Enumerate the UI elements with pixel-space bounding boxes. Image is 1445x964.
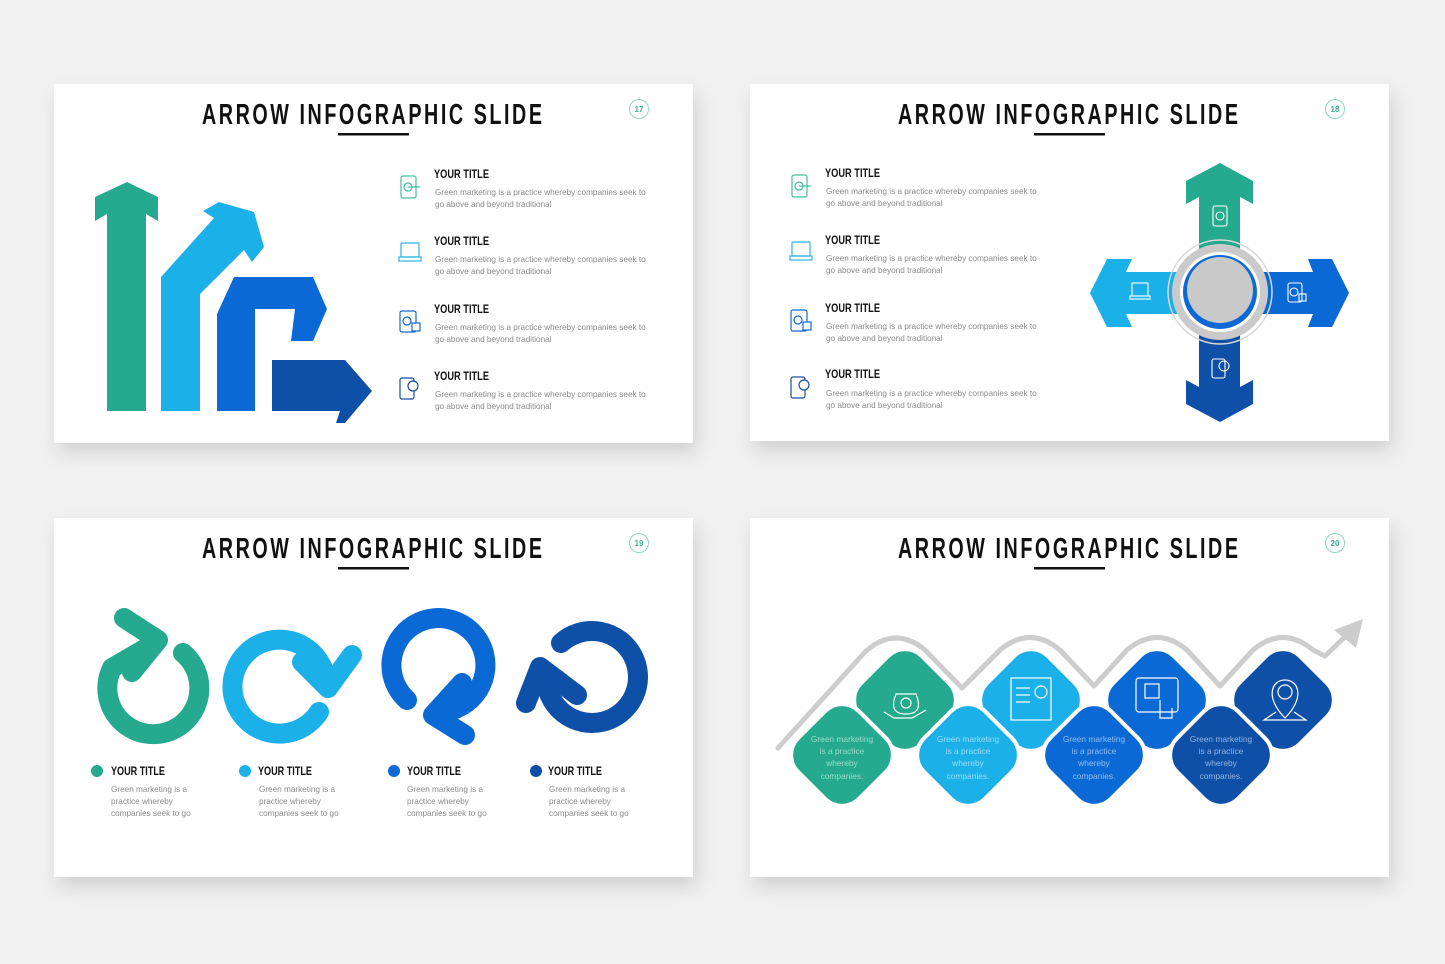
diamonds row [781,639,1344,816]
legend 2: YOUR TITLE [258,766,312,778]
icons on arrows [1130,206,1306,378]
item 2 [790,235,1037,275]
item 2: YOUR TITLE [434,236,489,248]
item 4 [400,371,646,411]
diamond: dark blue text: is a practice [1199,746,1244,756]
item 2: go above and beyond traditional [826,266,943,275]
diamond: blue text: Green marketing [1063,734,1126,744]
page number [1326,534,1344,552]
item 2: Green marketing is a practice whereby companies seek to [826,254,1037,263]
item 3: YOUR TITLE [434,304,489,316]
diamond: green text: is a practice [820,746,865,756]
legend 2: companies seek to go [259,809,339,818]
item 3 [400,304,646,344]
legend 3: companies seek to go [407,809,487,818]
title: ARROW INFOGRAPHIC SLIDE [898,533,1238,565]
legend 4: Green marketing is a [549,785,625,794]
item 1: YOUR TITLE [434,169,489,181]
circular arrow: dark blue [526,631,638,723]
item 1 [792,168,1037,208]
arrow: blue bend [217,277,327,411]
gray zigzag arrow [778,619,1363,748]
page number [630,534,648,552]
page number [630,100,648,118]
legend 3: YOUR TITLE [407,766,461,778]
legend 3: Green marketing is a [407,785,483,794]
item 1: go above and beyond traditional [826,199,943,208]
item 4: Green marketing is a practice whereby companies seek to [826,389,1037,398]
item 4: YOUR TITLE [434,371,489,383]
circular arrow: blue [391,618,485,735]
item 1: Green marketing is a practice whereby companies seek to [435,188,646,197]
item 3: go above and beyond traditional [435,335,552,344]
legend items [91,765,629,818]
item 2: YOUR TITLE [825,235,880,247]
list items [399,169,646,411]
item 1: go above and beyond traditional [435,200,552,209]
diamond: dark blue text [1160,694,1282,816]
diamond: dark blue text: companies. [1200,771,1242,781]
legend 4: practice whereby [549,797,612,806]
title: ARROW INFOGRAPHIC SLIDE [202,99,542,131]
panel: slide 17 [54,84,693,443]
panel: slide 19 [54,518,693,877]
item 3 [791,303,1037,343]
legend 3 [388,765,487,818]
arrow: up green [1186,163,1253,293]
diamond: blue text [1033,694,1155,816]
item 3: go above and beyond traditional [826,334,943,343]
diamond: green text: Green marketing [811,734,874,744]
circular arrow: green [107,618,199,734]
legend 1: Green marketing is a [111,785,187,794]
diamond: light blue text: is a practice [946,746,991,756]
item 1 [401,169,646,209]
page number: 18 [1331,105,1340,114]
diamond: dark blue icon [1222,639,1344,761]
legend 2: practice whereby [259,797,322,806]
item 1: Green marketing is a practice whereby companies seek to [826,187,1037,196]
list items [790,168,1037,410]
item 4: go above and beyond traditional [435,402,552,411]
diamond: dark blue text: whereby [1204,758,1238,768]
page number [1326,100,1344,118]
diamond: light blue text [907,694,1029,816]
diamond: light blue text: companies. [947,771,989,781]
legend 2 [239,765,339,818]
legend 1 [91,765,191,818]
item 3: Green marketing is a practice whereby companies seek to [435,323,646,332]
arrow: dark blue right [272,360,372,423]
circular arrow: light blue [232,640,352,734]
diamond: blue text: is a practice [1072,746,1117,756]
legend 1: practice whereby [111,797,174,806]
arrow: down dark [1186,293,1253,422]
item 4: Green marketing is a practice whereby companies seek to [435,390,646,399]
title: ARROW INFOGRAPHIC SLIDE [898,99,1238,131]
center circle [1168,240,1272,344]
legend 2: Green marketing is a [259,785,335,794]
cross arrows diagram [1090,163,1349,422]
item 3: Green marketing is a practice whereby companies seek to [826,322,1037,331]
diamond: green text: whereby [825,758,859,768]
page number: 17 [635,105,644,114]
arrow: left light blue [1090,259,1220,327]
legend 1: YOUR TITLE [111,766,165,778]
legend 4 [530,765,629,818]
page number: 19 [635,539,644,548]
diamond: blue text: companies. [1073,771,1115,781]
arrow: light blue diagonal [161,202,264,411]
legend 4: companies seek to go [549,809,629,818]
item 2 [399,236,646,276]
arrow: right blue [1220,259,1349,327]
arrow: green up [95,182,158,411]
item 4 [791,369,1037,410]
diamond: light blue icon [970,639,1092,761]
item 2: go above and beyond traditional [435,267,552,276]
item 4: go above and beyond traditional [826,401,943,410]
title: ARROW INFOGRAPHIC SLIDE [202,533,542,565]
item 1: YOUR TITLE [825,168,880,180]
item 4: YOUR TITLE [825,369,880,381]
diamond: light blue text: whereby [951,758,985,768]
panel: slide 18 [750,84,1389,441]
diamond: blue text: whereby [1077,758,1111,768]
panel: slide 20 [750,518,1389,877]
diamond: blue icon [1096,639,1218,761]
diamond: green text [781,694,903,816]
diamond: green icon [844,639,966,761]
legend 1: companies seek to go [111,809,191,818]
diamond: light blue text: Green marketing [937,734,1000,744]
page number: 20 [1331,539,1340,548]
legend 4: YOUR TITLE [548,766,602,778]
item 3: YOUR TITLE [825,303,880,315]
diamond: dark blue text: Green marketing [1190,734,1253,744]
item 2: Green marketing is a practice whereby companies seek to [435,255,646,264]
diamond: green text: companies. [821,771,863,781]
legend 3: practice whereby [407,797,470,806]
